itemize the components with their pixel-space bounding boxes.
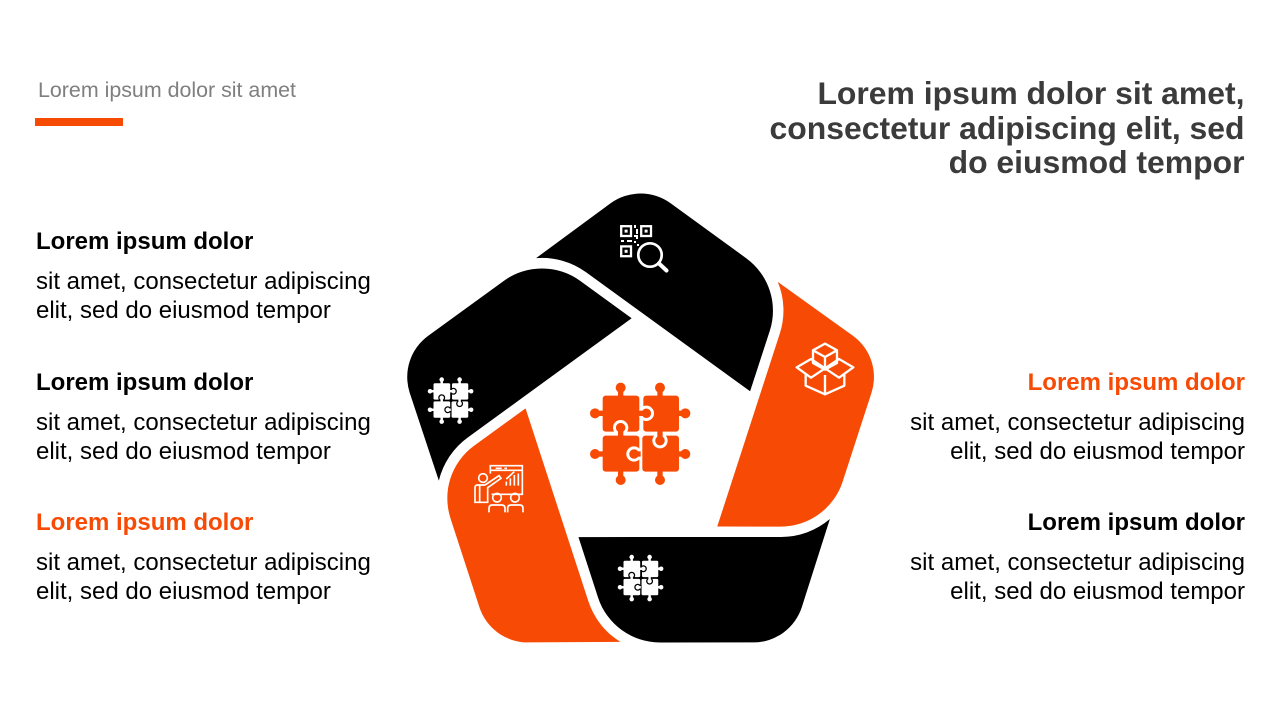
- icon: presenter: [475, 466, 523, 512]
- body: left 1: [36, 268, 371, 324]
- body: left 2: [36, 408, 371, 465]
- body: left 3: [36, 548, 371, 605]
- segment: bottom black: [560, 411, 868, 710]
- icon: bottom puzzle: [618, 555, 663, 601]
- body: left 1: sit amet, consectetur adipiscing: [36, 268, 371, 294]
- title: [770, 75, 1244, 180]
- body: right 2: sit amet, consectetur adipiscing: [910, 548, 1245, 576]
- body: left 3: sit amet, consectetur adipiscing: [36, 548, 371, 576]
- body: right 2: elit, sed do eiusmod tempor: [950, 578, 1245, 605]
- heading: left 3: Lorem ipsum dolor: [36, 509, 253, 536]
- text block: right 2: [910, 509, 1245, 605]
- segment: top black: [536, 194, 773, 391]
- heading: right 2: Lorem ipsum dolor: [1028, 509, 1245, 536]
- title: Lorem ipsum dolor sit amet,: [817, 75, 1244, 111]
- body: left 3: elit, sed do eiusmod tempor: [36, 578, 331, 605]
- icon: QR code and magnifier: [621, 225, 666, 270]
- body: right 1: sit amet, consectetur adipiscing: [910, 408, 1245, 436]
- body: right 1: elit, sed do eiusmod tempor: [950, 438, 1245, 465]
- text block: left 3: [36, 509, 371, 605]
- segment: left black: [377, 235, 639, 522]
- body: right 1: [910, 408, 1245, 465]
- icon: left puzzle: [428, 377, 473, 424]
- accent bar: [35, 118, 123, 126]
- body: left 2: elit, sed do eiusmod tempor: [36, 438, 331, 465]
- segment: right orange: [651, 262, 912, 548]
- text block: right 1: [910, 369, 1245, 465]
- title: do eiusmod tempor: [949, 144, 1244, 180]
- title: consectetur adipiscing elit, sed: [770, 110, 1244, 146]
- text block: left 2: [36, 369, 371, 465]
- text block: left 1: [36, 228, 371, 324]
- heading: left 1: Lorem ipsum dolor: [36, 228, 253, 255]
- icon: boxes: [797, 344, 853, 394]
- body: left 2: sit amet, consectetur adipiscing: [36, 408, 371, 436]
- body: left 1: elit, sed do eiusmod tempor: [36, 297, 331, 324]
- icon: centre puzzle: [590, 383, 690, 485]
- body: right 2: [910, 548, 1245, 605]
- heading: right 1: Lorem ipsum dolor: [1028, 369, 1245, 396]
- heading: left 2: Lorem ipsum dolor: [36, 369, 253, 396]
- segment: left orange: [391, 395, 699, 694]
- subtitle: Lorem ipsum dolor sit amet: [38, 78, 296, 102]
